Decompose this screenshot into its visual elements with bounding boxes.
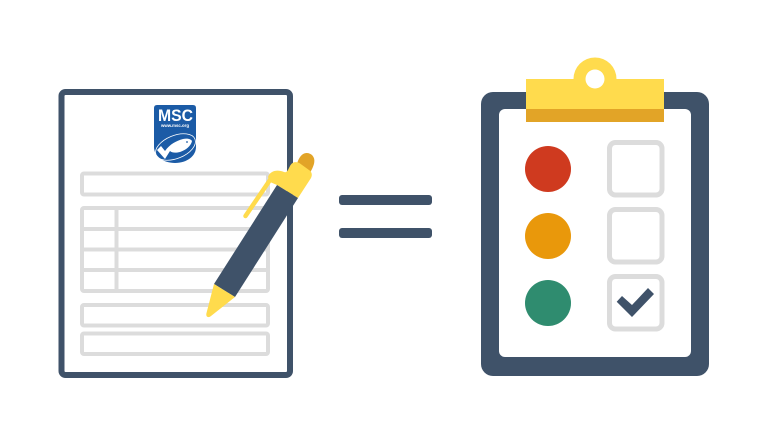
MSC logo: www.msc.org xyxy=(160,123,189,128)
status: green xyxy=(525,280,571,326)
checked checkbox xyxy=(610,276,662,329)
form fields xyxy=(82,174,268,354)
panel: clipboard checklist xyxy=(481,58,709,376)
clipboard board xyxy=(481,92,709,376)
status: amber xyxy=(525,213,571,259)
equals sign xyxy=(339,195,432,238)
clipboard paper xyxy=(499,109,691,357)
pen clip xyxy=(246,177,272,216)
panel: certificate document xyxy=(62,92,314,375)
MSC logo: MSC xyxy=(158,107,193,125)
pen cap xyxy=(268,162,312,198)
pen tip xyxy=(206,284,235,317)
document sheet xyxy=(62,92,290,375)
empty checkbox 1 xyxy=(610,142,662,195)
pen clicker xyxy=(297,153,314,173)
clipboard clip xyxy=(526,58,664,122)
status: red xyxy=(525,146,571,192)
pen barrel xyxy=(214,185,298,297)
MSC logo xyxy=(152,105,199,166)
empty checkbox 2 xyxy=(610,210,662,262)
icon: pen xyxy=(206,153,314,317)
